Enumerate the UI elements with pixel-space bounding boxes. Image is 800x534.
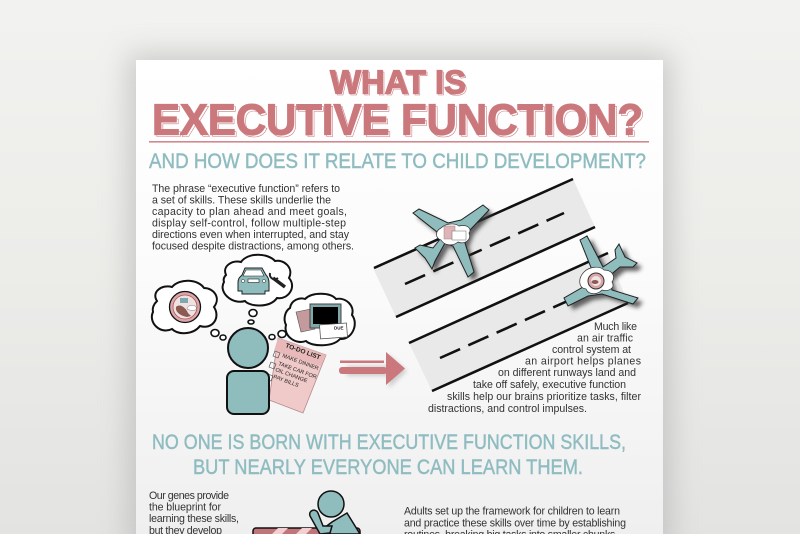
air traffic text: on different runways land and [498, 367, 636, 379]
section heading: BUT NEARLY EVERYONE CAN LEARN THEM. [193, 456, 583, 479]
title: EXECUTIVE FUNCTION? [152, 96, 643, 144]
subtitle: AND HOW DOES IT RELATE TO CHILD DEVELOPMENT? [149, 150, 646, 173]
icon: plane two [564, 236, 643, 310]
title: WHAT IS [330, 64, 466, 100]
title rule [149, 141, 649, 143]
icon: plane one [413, 205, 493, 281]
thought bubble: meal [152, 281, 217, 333]
intro text: directions even when interrupted, and stay [152, 229, 350, 241]
air traffic text: distractions, and control impulses. [428, 403, 587, 415]
to-do list: TO-DO LIST [284, 342, 321, 361]
title: WHAT IS [332, 65, 468, 102]
intro text: display self-control, follow multiple-step [152, 218, 346, 230]
thought bubble: bills and computer: DUE [334, 326, 344, 330]
thought dots [211, 310, 286, 340]
to-do list: TAKE CAR FOR [277, 361, 317, 381]
adults text: and practice these skills over time by establishing [404, 518, 626, 530]
icon: person thinking [227, 328, 269, 414]
to-do list: OIL CHANGE [274, 367, 308, 385]
air traffic text: Much like [594, 321, 637, 333]
adults text: Adults set up the framework for children to learn [404, 506, 620, 518]
air traffic text: an airport helps planes [525, 356, 641, 368]
genes text: learning these skills, [149, 513, 239, 525]
to-do list: MAKE DINNER [281, 353, 319, 372]
section heading: NO ONE IS BORN WITH EXECUTIVE FUNCTION SKILLS, [152, 431, 626, 454]
arrow [339, 352, 407, 388]
genes text [149, 490, 239, 534]
to-do list: PAY BILLS [272, 374, 300, 389]
air traffic text [428, 321, 641, 415]
thought bubble: bills and computer [285, 294, 355, 345]
intro text: capacity to plan ahead and meet goals, [152, 206, 347, 218]
adults text [404, 506, 626, 534]
genes text: the blueprint for [149, 502, 221, 514]
genes text: Our genes provide [149, 490, 229, 502]
air traffic text: an air traffic [577, 332, 634, 344]
title [152, 64, 645, 146]
title: EXECUTIVE FUNCTION? [154, 98, 645, 146]
air traffic text: skills help our brains prioritize tasks, filter [447, 391, 641, 403]
to-do list [266, 338, 326, 413]
illustration: person building [253, 491, 360, 534]
section heading [152, 431, 626, 479]
illustration: runways [373, 179, 628, 391]
intro text [152, 183, 354, 252]
intro text: a set of skills. These skills underlie the [152, 194, 331, 206]
page panel [136, 60, 663, 534]
intro text: The phrase “executive function” refers to [152, 183, 340, 195]
air traffic text: take off safely, executive function [473, 379, 626, 391]
intro text: focused despite distractions, among others. [152, 240, 354, 252]
air traffic text: control system at [552, 344, 631, 356]
thought bubble: car and wrench [223, 255, 292, 306]
